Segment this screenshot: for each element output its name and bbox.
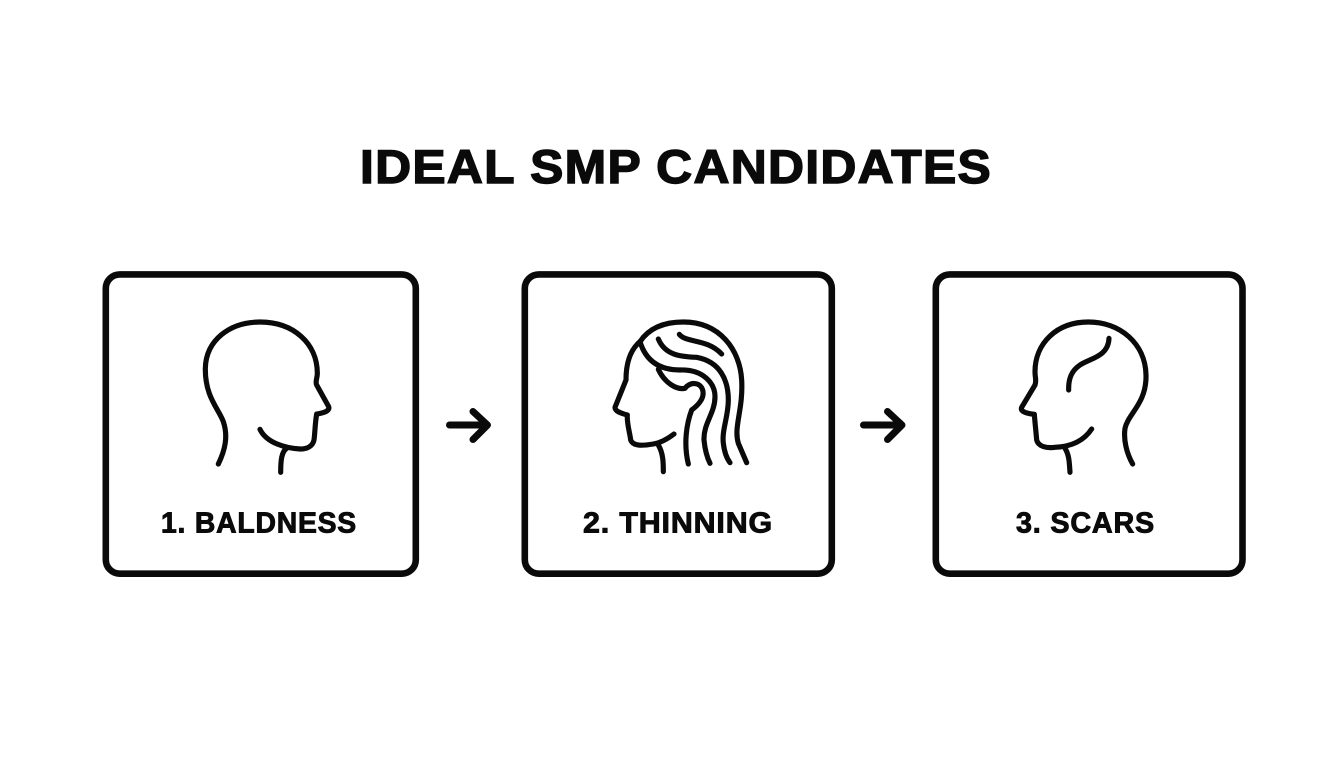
panel: thinning xyxy=(525,274,832,574)
icon: head with thinning hair xyxy=(615,322,747,472)
arrow: baldness to thinning xyxy=(450,412,488,440)
title: IDEAL SMP CANDIDATES xyxy=(360,140,992,193)
label: thinning: 2. THINNING xyxy=(583,508,773,540)
panel frame: thinning xyxy=(525,274,832,574)
panel: baldness xyxy=(106,274,416,574)
arrow: thinning to scars xyxy=(864,412,902,440)
label: scars: 3. SCARS xyxy=(1016,508,1155,540)
label: baldness: 1. BALDNESS xyxy=(161,508,357,540)
icon: head with scar xyxy=(1021,322,1146,472)
panel: scars xyxy=(936,274,1242,574)
icon: bald head profile xyxy=(205,322,329,472)
panel frame: baldness xyxy=(106,274,416,574)
panel frame: scars xyxy=(936,274,1242,574)
